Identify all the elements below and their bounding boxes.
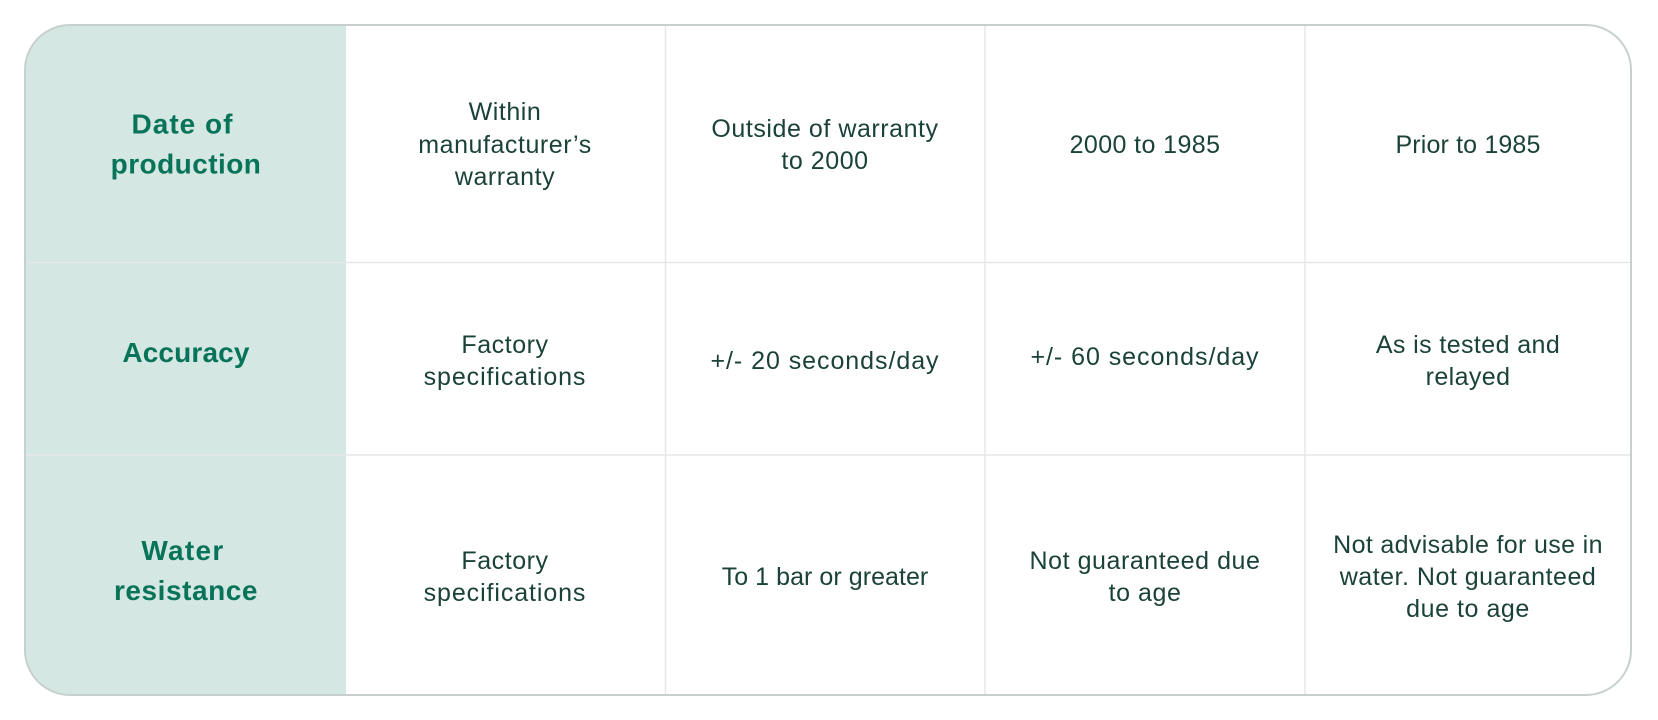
- cell: not advisable: Not advisable for use in: [1333, 531, 1603, 559]
- cell: factory specifications: specifications: [424, 579, 586, 607]
- heading: water resistance: resistance: [114, 575, 258, 606]
- cell: factory specifications: Factory: [461, 331, 549, 359]
- cell: within warranty: Within: [469, 98, 541, 126]
- row: water resistance: [114, 531, 1603, 623]
- cell: as is tested: As is tested and: [1376, 331, 1560, 359]
- heading: water resistance: Water: [141, 535, 225, 566]
- cell: plus minus 60 seconds: +/- 60 seconds/day: [1030, 343, 1260, 371]
- cell: outside of warranty: to 2000: [781, 147, 869, 175]
- cell: plus minus 20 seconds: +/- 20 seconds/day: [710, 347, 940, 375]
- cell: factory specifications: Factory: [461, 547, 549, 575]
- heading: date of production: Date of: [132, 108, 233, 140]
- cell: prior to 1985: Prior to 1985: [1395, 131, 1541, 159]
- heading: date of production: production: [111, 148, 261, 180]
- cell: outside of warranty: Outside of warranty: [711, 115, 939, 143]
- heading: accuracy: Accuracy: [122, 337, 250, 368]
- cell: within warranty: manufacturer’s: [418, 131, 592, 159]
- cell: to 1 bar: To 1 bar or greater: [722, 563, 928, 591]
- cell: factory specifications: specifications: [424, 363, 586, 391]
- cell: not guaranteed: to age: [1109, 579, 1181, 607]
- header column background: [25, 25, 346, 695]
- cell: not advisable: water. Not guaranteed: [1339, 563, 1596, 591]
- cell: as is tested: relayed: [1426, 363, 1510, 391]
- cell: within warranty: warranty: [454, 163, 555, 191]
- row: date of production: [111, 98, 1541, 191]
- cell: 2000 to 1985: 2000 to 1985: [1070, 131, 1220, 159]
- cell: not advisable: due to age: [1406, 595, 1530, 623]
- cell: not guaranteed: Not guaranteed due: [1030, 547, 1260, 575]
- row: accuracy: [122, 331, 1560, 391]
